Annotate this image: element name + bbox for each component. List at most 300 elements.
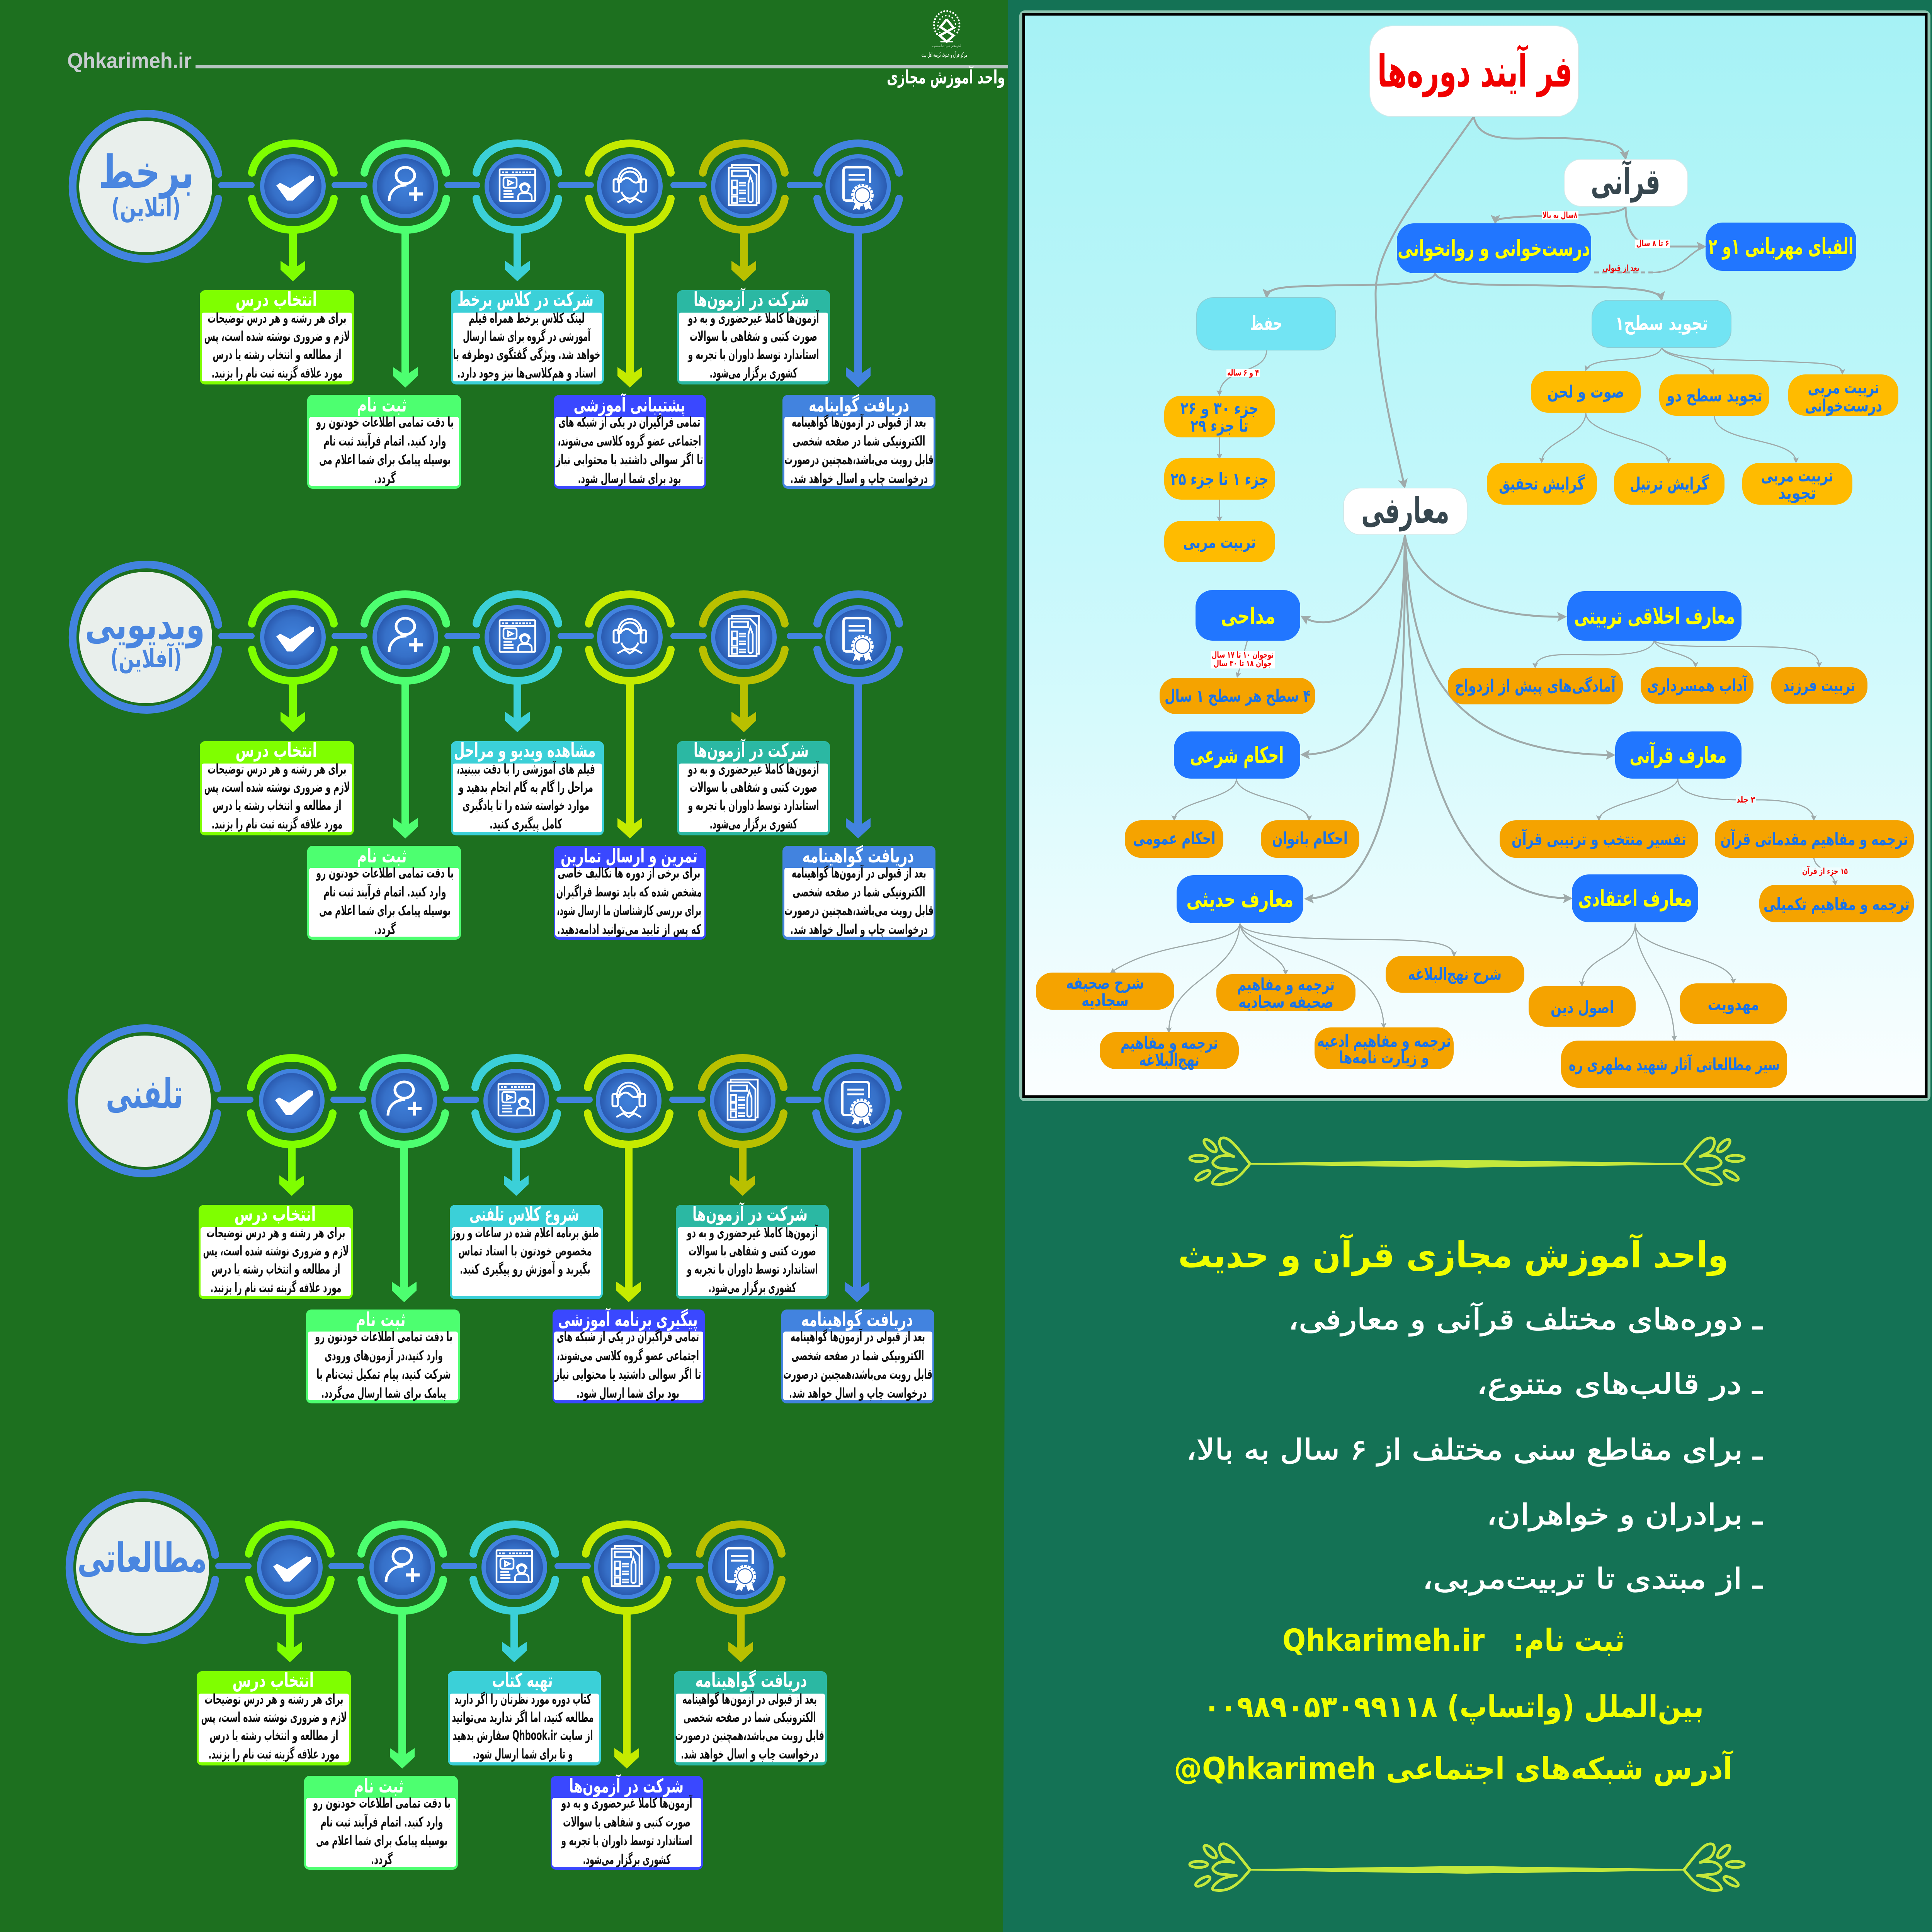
arrow: step 3 — [504, 1143, 529, 1196]
icon: exam — [703, 594, 785, 681]
category ring: برخط: (آنلاین) — [111, 192, 181, 223]
arrow: step 6 — [846, 228, 871, 388]
card: certificate: دریافت گواهینامه — [801, 1308, 913, 1331]
node: four levels: ۴ سطح هر سطح ۱ سال — [1165, 686, 1311, 706]
node: Quranic studies: معارف قرآنی — [1630, 741, 1726, 769]
icon: video class — [475, 1058, 557, 1145]
card: select course: برای هر رشته و هر درس توضیحات — [205, 1692, 343, 1707]
node: supplications translation: ترجمه و مفاهیم ادعیه — [1317, 1031, 1451, 1051]
card: watch video: فیلم های آموزشی را با دقت ببینید، — [457, 760, 595, 777]
node: tajvid level 2: تجوید سطح دو — [1666, 386, 1762, 406]
heading: virtual unit: واحد آموزش مجازی قرآن و حدیث — [1178, 1233, 1728, 1276]
connectors — [218, 633, 823, 639]
node: four levels — [1160, 678, 1315, 714]
card: certificate: درخواست چاپ و اسال خواهد شد. — [789, 1386, 927, 1401]
icon: exam — [703, 143, 785, 230]
arrow: step 3 — [502, 1609, 527, 1662]
list: course highlights: ـ برادران و خواهران، — [1486, 1498, 1763, 1531]
ornament: top — [1190, 1138, 1744, 1185]
icon: certificate — [700, 1524, 782, 1611]
node: Quranic: قرآنی — [1591, 160, 1660, 203]
node: voice and melody — [1531, 371, 1641, 413]
arrow: step 1 — [279, 1143, 304, 1196]
card: register: با دقت تمامی اطلاعات خودتون رو — [315, 1329, 452, 1345]
card: select course: از مطالعه و انتخاب رشته یا درس — [209, 1728, 338, 1743]
card: get the book: مطالعه کنید، اما اگر ندارید می‌توانید — [452, 1709, 594, 1725]
card: exams: شرکت در آزمون‌ها — [692, 1202, 808, 1226]
header: site name: Qhkarimeh.ir — [67, 48, 192, 73]
card: educational support — [554, 393, 706, 489]
node: tafsir — [1500, 820, 1698, 858]
node: memorization instructor: تربیت مربی — [1183, 532, 1256, 552]
card: select course: برای هر رشته و هر درس توضیحات — [208, 311, 346, 326]
node: memorization — [1197, 298, 1336, 350]
card: exams — [677, 287, 830, 384]
node: supplications translation: و زیارت نامه‌ها — [1339, 1048, 1429, 1068]
mind map frame — [1019, 10, 1930, 1101]
node: child raising: تربیت فرزند — [1783, 676, 1855, 696]
right background panel — [1003, 0, 1932, 1932]
card: exams: کشوری برگزار می‌شود. — [709, 1280, 796, 1296]
label: teen and youth ages: جوان ۱۸ تا ۳۰ سال — [1214, 659, 1272, 668]
card: get the book — [448, 1669, 601, 1765]
node: women's rulings — [1261, 820, 1359, 858]
card: exams: استاندارد توسط داوران با تجربه و — [687, 798, 819, 813]
node: religious rulings — [1174, 731, 1300, 779]
card: online class: لینک کلاس برخط همراه فیلم — [469, 311, 585, 326]
arrow: step 3 — [505, 679, 530, 732]
card: exams — [676, 1202, 829, 1299]
node: tajvid level 1: تجوید سطح۱ — [1615, 312, 1708, 335]
label: after passing: بعد از قبولی — [1603, 264, 1639, 273]
arrow: step 1 — [281, 228, 305, 281]
card: exams: آزمون‌ها کاملا غیرحضوری و به دو — [561, 1794, 692, 1811]
icon: user add — [364, 143, 446, 230]
card: exams: کشوری برگزار می‌شود. — [709, 816, 798, 832]
card: certificate — [781, 1308, 934, 1403]
ornament: bottom — [1190, 1844, 1744, 1891]
icon: exam — [702, 1058, 784, 1145]
node: Maarefi — [1344, 488, 1467, 535]
card: watch video: مشاهده ویدیو و مراحل — [454, 739, 596, 762]
icon: check — [252, 143, 334, 230]
contact: social: آدرس شبکه‌های اجتماعی Qhkarimeh@ — [1174, 1750, 1733, 1786]
card: certificate: بعد از قبولی در آزمون‌ها گواهینامه — [792, 413, 926, 430]
left background panel — [0, 0, 1009, 1932]
panel: course process mind map — [1019, 10, 1930, 1101]
node: tajvid level 2 — [1659, 374, 1769, 416]
card: certificate: درخواست چاپ و اسال خواهد شد. — [790, 471, 928, 486]
node: tajvid instructor: تربیت مربی — [1761, 466, 1833, 486]
node: supplications translation — [1315, 1027, 1454, 1069]
node: ethics studies: معارف اخلاقی تربیتی — [1574, 603, 1735, 629]
icon: video class — [473, 1524, 555, 1611]
card: register — [306, 1308, 460, 1403]
list: course highlights: ـ دوره‌های مختلف قرآنی و معارفی، — [1288, 1302, 1763, 1336]
card: exams: استاندارد توسط داوران با تجربه و — [561, 1833, 692, 1849]
card: certificate: دریافت گواهینامه — [802, 845, 914, 867]
card: register: بوسیله پیامک برای شما اعلام می — [316, 1833, 447, 1849]
card: certificate: بعد از قبولی در آزمون‌ها گواهینامه — [792, 864, 926, 881]
card: online class — [451, 288, 604, 384]
node: alphabet — [1706, 223, 1856, 271]
icon: headset — [589, 143, 671, 230]
node: memorization: حفظ — [1250, 312, 1282, 335]
card: select course: لازم و ضروری نوشته شده است، پس — [204, 329, 350, 344]
node: introductory translation — [1715, 820, 1914, 858]
node: sajjadiyya translation: ترجمه و مفاهیم — [1237, 975, 1335, 995]
node: nahj commentary — [1386, 956, 1524, 993]
card: certificate: الکترونیکی شما در صفحه شخصی — [791, 1348, 924, 1364]
icon: video class — [476, 143, 558, 230]
node: child raising — [1771, 667, 1867, 704]
category ring: مطالعاتی: مطالعاتی — [77, 1534, 207, 1582]
arrow: step 4 — [617, 228, 642, 388]
card: select course: مورد علاقه گزینه ثبت نام را بزنید. — [212, 365, 342, 381]
arrow: step 4 — [616, 1143, 641, 1302]
connectors — [218, 182, 823, 188]
header: logo — [922, 11, 967, 59]
root node: فر آیند دوره‌ها — [1377, 44, 1573, 97]
card: select course: لازم و ضروری نوشته شده است، پس — [201, 1710, 347, 1725]
contact: registration: ثبت نام: Qhkarimeh.ir — [1282, 1623, 1625, 1658]
card: educational support: بود برای شما ارسال شود. — [578, 471, 681, 486]
card: educational support: تا اگر سوالی داشتید یا محتوایی نیاز — [555, 452, 703, 468]
node: correct reading — [1397, 223, 1591, 273]
card: select course: برای هر رشته و هر درس توضیحات — [206, 1225, 345, 1241]
card: certificate: درخواست چاپ و اسال خواهد شد. — [681, 1747, 818, 1762]
card: exams: استاندارد توسط داوران با تجربه و — [686, 1262, 818, 1277]
card: practice and exercises: که پس از تایید می‌توانید ادامه‌دهید. — [557, 922, 701, 937]
row 4: self-study — [70, 1495, 827, 1870]
card: exams: شرکت در آزمون‌ها — [569, 1774, 684, 1798]
card: start phone class: طبق برنامه اعلام شده در ساعات و روز — [451, 1225, 599, 1241]
card: select course: مورد علاقه گزینه ثبت نام را بزنید. — [212, 816, 342, 832]
icon: certificate — [816, 1058, 898, 1145]
node: general rulings — [1125, 820, 1223, 858]
card: certificate: قابل رویت می‌باشد،همچنین درصورت — [784, 903, 934, 918]
category ring: برخط — [73, 114, 218, 259]
card: certificate: قابل رویت می‌باشد،همچنین درصورت — [784, 452, 934, 468]
contact: whatsapp: بین‌الملل (واتساپ) ۰۰۹۸۹۰۵۳۰۹۹۱۱۸ — [1203, 1690, 1704, 1725]
card: exams: آزمون‌ها کاملا غیرحضوری و به دو — [686, 1224, 818, 1241]
card: certificate: الکترونیکی شما در صفحه شخصی — [793, 884, 925, 900]
icon: certificate — [817, 594, 899, 681]
label: teen and youth ages: نوجوان ۱۰ تا ۱۷ سال — [1212, 650, 1274, 660]
icon: user add — [364, 594, 446, 681]
header: unit label: واحد آموزش مجازی — [887, 66, 1005, 88]
node: marriage preparation: آمادگی‌های پیش از ازدواج — [1455, 675, 1616, 696]
node: belief studies — [1572, 874, 1698, 922]
list: course highlights: ـ از مبتدی تا تربیت‌مربی، — [1422, 1562, 1763, 1595]
arrow: step 6 — [846, 679, 871, 838]
card: follow the program — [553, 1308, 705, 1403]
card: follow the program: تا اگر سوالی داشتید یا محتوایی نیاز — [554, 1366, 701, 1382]
card: select course: لازم و ضروری نوشته شده است، پس — [204, 780, 350, 795]
card: register: گردد. — [374, 922, 396, 937]
node: Quranic studies — [1615, 731, 1742, 779]
node: parts 30 and 26: جزء ۳۰ و ۲۶ — [1180, 399, 1259, 418]
card: follow the program: تمامی فراگیران در یکی از شبکه های — [557, 1329, 699, 1345]
card: get the book: و تا برای شما ارسال شود. — [473, 1747, 573, 1762]
node: correct reading: درست‌خوانی و روانخوانی — [1398, 235, 1590, 262]
card: online class: آموزشی در گروه برای شما ارسال — [463, 328, 591, 344]
arrow: step 1 — [277, 1609, 302, 1662]
card: certificate: دریافت گواهینامه — [696, 1669, 807, 1692]
card: exams: صورت کتبی و شفاهی با سوالات — [690, 329, 817, 344]
node: marriage preparation — [1448, 668, 1623, 704]
card: practice and exercises: مشخص شده که باید توسط فراگیران — [556, 884, 702, 900]
connectors — [215, 1563, 704, 1569]
node: sajjadiyya translation: صحیفه سجادیه — [1238, 992, 1333, 1012]
card: select course: از مطالعه و انتخاب رشته یا درس — [212, 1262, 340, 1277]
node: sajjadiyya translation — [1216, 974, 1355, 1012]
node: research branch: گرایش تحقیق — [1499, 474, 1585, 494]
card: register: با دقت تمامی اطلاعات خودتون رو — [316, 415, 454, 430]
card: get the book: از سایت Qhbook.ir سفارش بدهید — [453, 1728, 593, 1743]
node: motahhari study — [1561, 1041, 1787, 1088]
card: register: گردد. — [374, 471, 396, 486]
node: hadith studies — [1177, 875, 1303, 923]
card: exams — [677, 738, 830, 835]
card: select course: مورد علاقه گزینه ثبت نام را بزنید. — [210, 1280, 342, 1296]
node: spouse etiquette — [1641, 667, 1753, 704]
category ring: ویدیویی: ویدیویی — [85, 601, 205, 649]
card: watch video — [451, 739, 604, 835]
node: nahj translation: نهج‌البلاغه — [1139, 1050, 1199, 1070]
card: register — [307, 845, 461, 940]
card: select course: انتخاب درس — [236, 288, 317, 311]
card: follow the program: بود برای شما ارسال شود. — [577, 1386, 679, 1401]
node: nahj translation: ترجمه و مفاهیم — [1121, 1033, 1218, 1053]
node: complementary translation — [1759, 885, 1914, 922]
arrow: step 6 — [845, 1143, 869, 1302]
label: three volumes: ۳ جلد — [1736, 795, 1755, 805]
node: mahdism — [1680, 983, 1787, 1024]
node: parts 1 to 25 — [1164, 458, 1275, 500]
card: certificate — [674, 1669, 827, 1765]
card: register: وارد کنید. اتمام فرآیند ثبت نام — [324, 883, 446, 900]
node: general rulings: احکام عمومی — [1133, 829, 1216, 849]
card: register — [304, 1775, 458, 1870]
card: certificate: درخواست چاپ و اسال خواهد شد. — [790, 922, 928, 937]
arrow: step 1 — [281, 679, 305, 732]
card: register — [307, 394, 461, 489]
node: alphabet: الفبای مهربانی ۱و ۲ — [1709, 233, 1853, 260]
arrow: step 5 — [728, 1609, 753, 1662]
icon: video class — [476, 594, 558, 681]
card: certificate: الکترونیکی شما در صفحه شخصی — [793, 434, 925, 449]
card: start phone class: مخصوص خودتون با استاد تماس — [458, 1243, 592, 1259]
card: start phone class: بگیرید و آموزش رو پیگیری کنید. — [460, 1260, 590, 1277]
node: reading instructor: درست‌خوانی — [1805, 396, 1882, 416]
icon: check — [252, 594, 334, 681]
arrow: step 2 — [393, 228, 418, 388]
card: register: ثبت نام — [357, 394, 406, 416]
connectors — [217, 1097, 821, 1103]
list: course highlights: ـ در قالب‌های متنوع، — [1476, 1367, 1763, 1401]
card: select course — [199, 1203, 353, 1299]
card: register: ثبت نام — [357, 845, 406, 867]
card: exams: صورت کتبی و شفاهی با سوالات — [689, 1243, 816, 1259]
card: practice and exercises — [554, 845, 706, 940]
card: exams: شرکت در آزمون‌ها — [694, 287, 809, 311]
node: principles of religion: اصول دین — [1551, 998, 1614, 1017]
card: select course: برای هر رشته و هر درس توضیحات — [208, 762, 346, 777]
node: Quranic — [1564, 159, 1688, 206]
card: educational support: تمامی فراگیران در یکی از شبکه های — [559, 414, 700, 430]
card: certificate: قابل رویت می‌باشد،همچنین درصورت — [783, 1367, 932, 1382]
card: exams: استاندارد توسط داوران با تجربه و — [687, 347, 819, 362]
arrow: step 3 — [505, 228, 530, 281]
node: eulogy — [1196, 590, 1300, 641]
label: age 4 and 6: ۴ و ۶ ساله — [1227, 368, 1259, 378]
arrow: step 2 — [390, 1609, 415, 1769]
arrow: step 5 — [730, 1143, 755, 1196]
card: register: وارد کنید. اتمام فرآیند ثبت نام — [324, 432, 446, 449]
card: exams: آزمون‌ها کاملا غیرحضوری و به دو — [687, 760, 819, 777]
node: nahj commentary: شرح نهج‌البلاغه — [1408, 964, 1502, 984]
node: eulogy: مداحی — [1221, 603, 1275, 629]
card: practice and exercises: برای برخی از دوره ها تکالیف خاصی — [558, 866, 700, 881]
card: practice and exercises: تمرین و ارسال تمارین — [561, 845, 697, 867]
header: logo: مرکز قرآن و حدیث کریمه اهل بیت — [922, 51, 967, 59]
card: follow the program: پیگیری برنامه آموزشی — [558, 1308, 698, 1331]
node: reading instructor — [1788, 374, 1898, 416]
card: select course: انتخاب درس — [233, 1669, 314, 1692]
card: start phone class: شروع کلاس تلفنی — [469, 1203, 579, 1226]
arrow: step 2 — [392, 1143, 417, 1302]
card: certificate: دریافت گواینامه — [809, 394, 909, 417]
label: teen and youth ages — [1211, 650, 1275, 668]
category ring: ویدیویی: (آفلاین) — [111, 643, 182, 673]
card: exams: کشوری برگزار می‌شود. — [709, 365, 798, 381]
card: register: وارد کنید،در آزمون‌های ورودی — [325, 1347, 443, 1364]
card: select course: از مطالعه و انتخاب رشته یا درس — [213, 798, 342, 813]
node: women's rulings: احکام بانوان — [1272, 829, 1348, 849]
card: exams: صورت کتبی و شفاهی با سوالات — [690, 780, 817, 795]
node: parts 1 to 25: جزء ۱ تا جزء ۲۵ — [1171, 469, 1268, 489]
icon: check — [249, 1524, 331, 1611]
node: ethics studies — [1567, 591, 1742, 641]
card: watch video: موارد خواسته شده را تا یادگیری — [463, 798, 589, 813]
node: mahdism: مهدویت — [1708, 995, 1759, 1014]
card: select course — [197, 1669, 351, 1765]
node: tajvid instructor: تجوید — [1778, 483, 1816, 503]
card: certificate — [782, 845, 935, 940]
category ring: مطالعاتی — [70, 1495, 215, 1640]
label: age 6 to 8: ۶ تا ۸ سال — [1636, 239, 1669, 248]
card: get the book: تهیه کتاب — [492, 1669, 553, 1692]
node: tafsir: تفسیر منتخب و ترتیبی قرآن — [1512, 828, 1686, 849]
category ring: تلفنی — [71, 1028, 217, 1173]
card: select course: انتخاب درس — [234, 1203, 316, 1225]
card: watch video: مراحل را گام به گام انجام بدهید و — [458, 779, 593, 795]
card: select course — [200, 288, 354, 384]
card: educational support: پشتیبانی آموزشی — [573, 393, 685, 417]
card: select course: انتخاب درس — [236, 739, 317, 762]
icon: exam — [586, 1524, 668, 1611]
icon: headset — [588, 1058, 670, 1145]
node: sajjadiyya commentary: سجادیه — [1082, 991, 1129, 1010]
card: register: ثبت نام — [354, 1775, 403, 1797]
node: Maarefi: معارفی — [1361, 490, 1449, 531]
card: certificate: بعد از قبولی در آزمون‌ها گواهینامه — [791, 1328, 925, 1345]
header: divider line — [196, 65, 1008, 68]
arrow: step 4 — [614, 1609, 639, 1769]
node: motahhari study: سیر مطالعاتی آثار شهید مطهری ره — [1569, 1054, 1780, 1075]
category ring: برخط: برخط — [99, 145, 194, 199]
card: online class: خواهد شد. ویژگی گفتگوی دوطرفه با — [453, 347, 600, 362]
card: register: شرکت کنید، پیام تمکیل ثبت‌نام با — [316, 1367, 451, 1382]
node: memorization instructor — [1164, 521, 1275, 562]
card: select course: لازم و ضروری نوشته شده است، پس — [203, 1243, 349, 1259]
node: nahj translation — [1100, 1032, 1239, 1070]
label: fifteen parts: ۱۵ جزء از قرآن — [1802, 866, 1848, 876]
card: exams — [551, 1774, 703, 1870]
connector lines — [1111, 117, 1842, 1040]
card: register: با دقت تمامی اطلاعات خودتون رو — [316, 866, 454, 881]
card: exams: صورت کتبی و شفاهی با سوالات — [563, 1815, 690, 1830]
list: course highlights: ـ برای مقاطع سنی مختلف از ۶ سال به بالا، — [1186, 1433, 1763, 1466]
node: research branch — [1487, 463, 1597, 505]
icon: user add — [361, 1524, 443, 1611]
card: register: بوسیله پیامک برای شما اعلام می — [319, 903, 451, 918]
label: age 8 and up: ۸سال به بالا — [1543, 211, 1577, 220]
card: start phone class — [450, 1203, 603, 1299]
card: follow the program: اجتماعی عضو گروه کلاسی می‌شوند، — [557, 1348, 699, 1364]
node: sajjadiyya commentary: شرح صحیفه — [1066, 973, 1144, 993]
card: select course: از مطالعه و انتخاب رشته یا درس — [213, 347, 342, 362]
card: register: گردد. — [371, 1852, 393, 1867]
card: register: بوسیله پیامک برای شما اعلام می — [319, 452, 451, 468]
node: parts 30 and 26 — [1164, 396, 1275, 437]
row 1: online — [73, 114, 935, 489]
list: course highlights — [1186, 1302, 1763, 1595]
card: exams: کشوری برگزار می‌شود. — [583, 1852, 671, 1867]
card: certificate — [782, 394, 935, 489]
node: religious rulings: احکام شرعی — [1190, 742, 1284, 769]
node: spouse etiquette: آداب همسرداری — [1647, 675, 1747, 696]
card: practice and exercises: برای بررسی کارشناسان ما ارسال شود، — [557, 903, 701, 918]
card: online class: شرکت در کلاس برخط — [457, 288, 594, 311]
node: tajvid instructor — [1742, 463, 1852, 505]
node: voice and melody: صوت و لحن — [1547, 382, 1624, 402]
arrow: step 5 — [731, 228, 756, 281]
card: certificate: قابل رویت می‌باشد،همچنین درصورت — [675, 1728, 824, 1743]
node: principles of religion — [1529, 986, 1636, 1027]
arrow: step 4 — [617, 679, 642, 838]
card: register: پیامک برای شما ارسال می‌گردد. — [321, 1385, 446, 1401]
node: tarteel branch: گرایش ترتیل — [1630, 474, 1709, 494]
arrow: step 2 — [393, 679, 418, 838]
card: certificate: الکترونیکی شما در صفحه شخصی — [683, 1710, 816, 1725]
card: get the book: کتاب دوره مورد نظرتان را اگر دارید — [454, 1691, 591, 1707]
header: logo: آستان مقدس حضرت فاطمه معصومه — [932, 44, 961, 48]
arrow: step 5 — [731, 679, 756, 732]
category ring: تلفنی: تلفنی — [106, 1070, 183, 1117]
card: educational support: اجتماعی عضو گروه کلاسی می‌شوند، — [558, 433, 701, 449]
card: exams: آزمون‌ها کاملا غیرحضوری و به دو — [687, 310, 819, 326]
card: register: با دقت تمامی اطلاعات خودتون رو — [313, 1796, 451, 1811]
node: sajjadiyya commentary — [1036, 973, 1174, 1010]
node: hadith studies: معارف حدیثی — [1186, 886, 1294, 912]
card: watch video: کامل پیگیری کنید. — [490, 816, 562, 832]
category ring: ویدیویی — [73, 565, 218, 710]
card: select course: مورد علاقه گزینه ثبت نام را بزنید. — [209, 1746, 339, 1762]
card: register: وارد کنید. اتمام فرآیند ثبت نام — [321, 1813, 443, 1830]
icon: user add — [363, 1058, 445, 1145]
